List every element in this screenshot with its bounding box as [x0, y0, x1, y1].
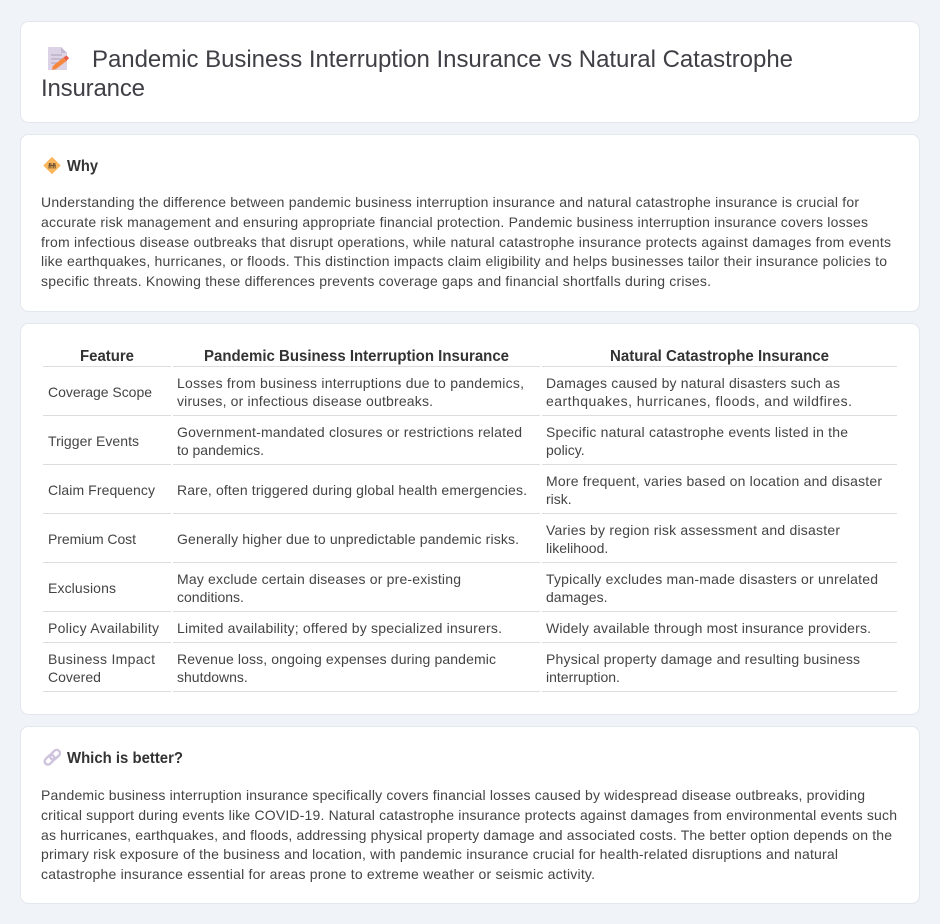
text block: why explanation	[41, 194, 891, 289]
row: premium cost: likelihood.	[546, 540, 608, 556]
title text	[41, 46, 793, 102]
row: claim frequency: More frequent, varies based on location and disaster	[546, 473, 882, 489]
row: premium cost: Generally higher due to unpredictable pandemic risks.	[177, 531, 519, 547]
row: exclusions: damages.	[546, 589, 607, 605]
row: claim frequency	[48, 473, 882, 507]
row: premium cost: Premium Cost	[48, 531, 136, 547]
text block: recommendation: critical support during events like COVID-19. Natural catastrophe insurance protects against damages from environmental events such	[41, 807, 897, 823]
row: business impact covered: Covered	[48, 669, 101, 685]
row: trigger events: to pandemics.	[177, 442, 264, 458]
text block: recommendation: catastrophe insurance essential for areas prone to extreme weather or seismic activity.	[41, 866, 595, 882]
text block: why explanation: Understanding the difference between pandemic business interruption insurance and natural catastrophe insurance is crucial for	[41, 194, 859, 210]
text block: why explanation: from infectious disease outbreaks that disrupt operations, while natural catastrophe insurance protects against damages from events	[41, 234, 891, 250]
row: coverage scope: Damages caused by natural disasters such as	[546, 375, 840, 391]
row: coverage scope: Coverage Scope	[48, 384, 152, 400]
row: trigger events: policy.	[546, 442, 585, 458]
icon: diamond warning sign	[44, 158, 60, 174]
row: business impact covered	[48, 651, 860, 685]
row: exclusions: conditions.	[177, 589, 244, 605]
row: business impact covered: shutdowns.	[177, 669, 248, 685]
row: policy availability	[48, 620, 871, 636]
row: claim frequency: Claim Frequency	[48, 482, 155, 498]
table header row: Feature	[80, 348, 134, 365]
row: policy availability: Policy Availability	[48, 620, 159, 636]
text block: why explanation: specific threats. Knowing these differences prevents coverage gaps and financial shortfalls during crises.	[41, 273, 711, 289]
row: exclusions: Typically excludes man-made disasters or unrelated	[546, 571, 878, 587]
row: coverage scope: viruses, or infectious disease outbreaks.	[177, 393, 433, 409]
text block: recommendation	[41, 787, 897, 882]
text block: recommendation: primary risk exposure of the business and location, with pandemic insurance crucial for health-related disruptions and natural	[41, 846, 838, 862]
row: claim frequency: risk.	[546, 491, 572, 507]
panel: comparison table	[20, 324, 920, 714]
panel: title	[20, 22, 920, 122]
icon: memo with pencil	[48, 47, 69, 70]
panel: why	[20, 134, 920, 312]
heading: which is better: Which is better?	[67, 750, 183, 767]
row: business impact covered: Physical property damage and resulting business	[546, 651, 860, 667]
heading: why: Why	[67, 158, 98, 175]
icon: chain link	[43, 749, 61, 766]
row: trigger events	[48, 424, 848, 458]
row: policy availability: Limited availability; offered by specialized insurers.	[177, 620, 502, 636]
row: policy availability: Widely available through most insurance providers.	[546, 620, 871, 636]
table header row: Natural Catastrophe Insurance	[610, 348, 829, 365]
row: trigger events: Specific natural catastrophe events listed in the	[546, 424, 848, 440]
row: business impact covered: Business Impact	[48, 651, 155, 667]
table header row	[80, 348, 829, 365]
panel: which is better	[20, 726, 920, 904]
row: business impact covered: interruption.	[546, 669, 620, 685]
row: coverage scope: earthquakes, hurricanes, floods, and wildfires.	[546, 393, 852, 409]
row: exclusions	[48, 571, 878, 605]
text block: why explanation: accurate risk management and ensuring appropriate financial protection. Pandemic business interruption insurance covers losses	[41, 214, 868, 230]
table header row: Pandemic Business Interruption Insurance	[204, 348, 509, 365]
row: premium cost: Varies by region risk assessment and disaster	[546, 522, 840, 538]
row: business impact covered: Revenue loss, ongoing expenses during pandemic	[177, 651, 496, 667]
title text: Pandemic Business Interruption Insurance vs Natural Catastrophe	[92, 46, 793, 73]
title text: Insurance	[41, 75, 145, 102]
row: exclusions: May exclude certain diseases or pre-existing	[177, 571, 461, 587]
text block: why explanation: like earthquakes, hurricanes, or floods. This distinction impacts claim eligibility and helps businesses tailor their insurance policies to	[41, 253, 887, 269]
text block: recommendation: as hurricanes, earthquakes, and floods, addressing physical property damage and associated costs. The better option depends on the	[41, 827, 892, 843]
row: trigger events: Trigger Events	[48, 433, 139, 449]
row: claim frequency: Rare, often triggered during global health emergencies.	[177, 482, 527, 498]
text block: recommendation: Pandemic business interruption insurance specifically covers financial losses caused by widespread disease outbreaks, providing	[41, 787, 865, 803]
row: exclusions: Exclusions	[48, 580, 116, 596]
row: trigger events: Government-mandated closures or restrictions related	[177, 424, 522, 440]
row: coverage scope	[48, 375, 852, 409]
row: premium cost	[48, 522, 840, 556]
row: coverage scope: Losses from business interruptions due to pandemics,	[177, 375, 524, 391]
